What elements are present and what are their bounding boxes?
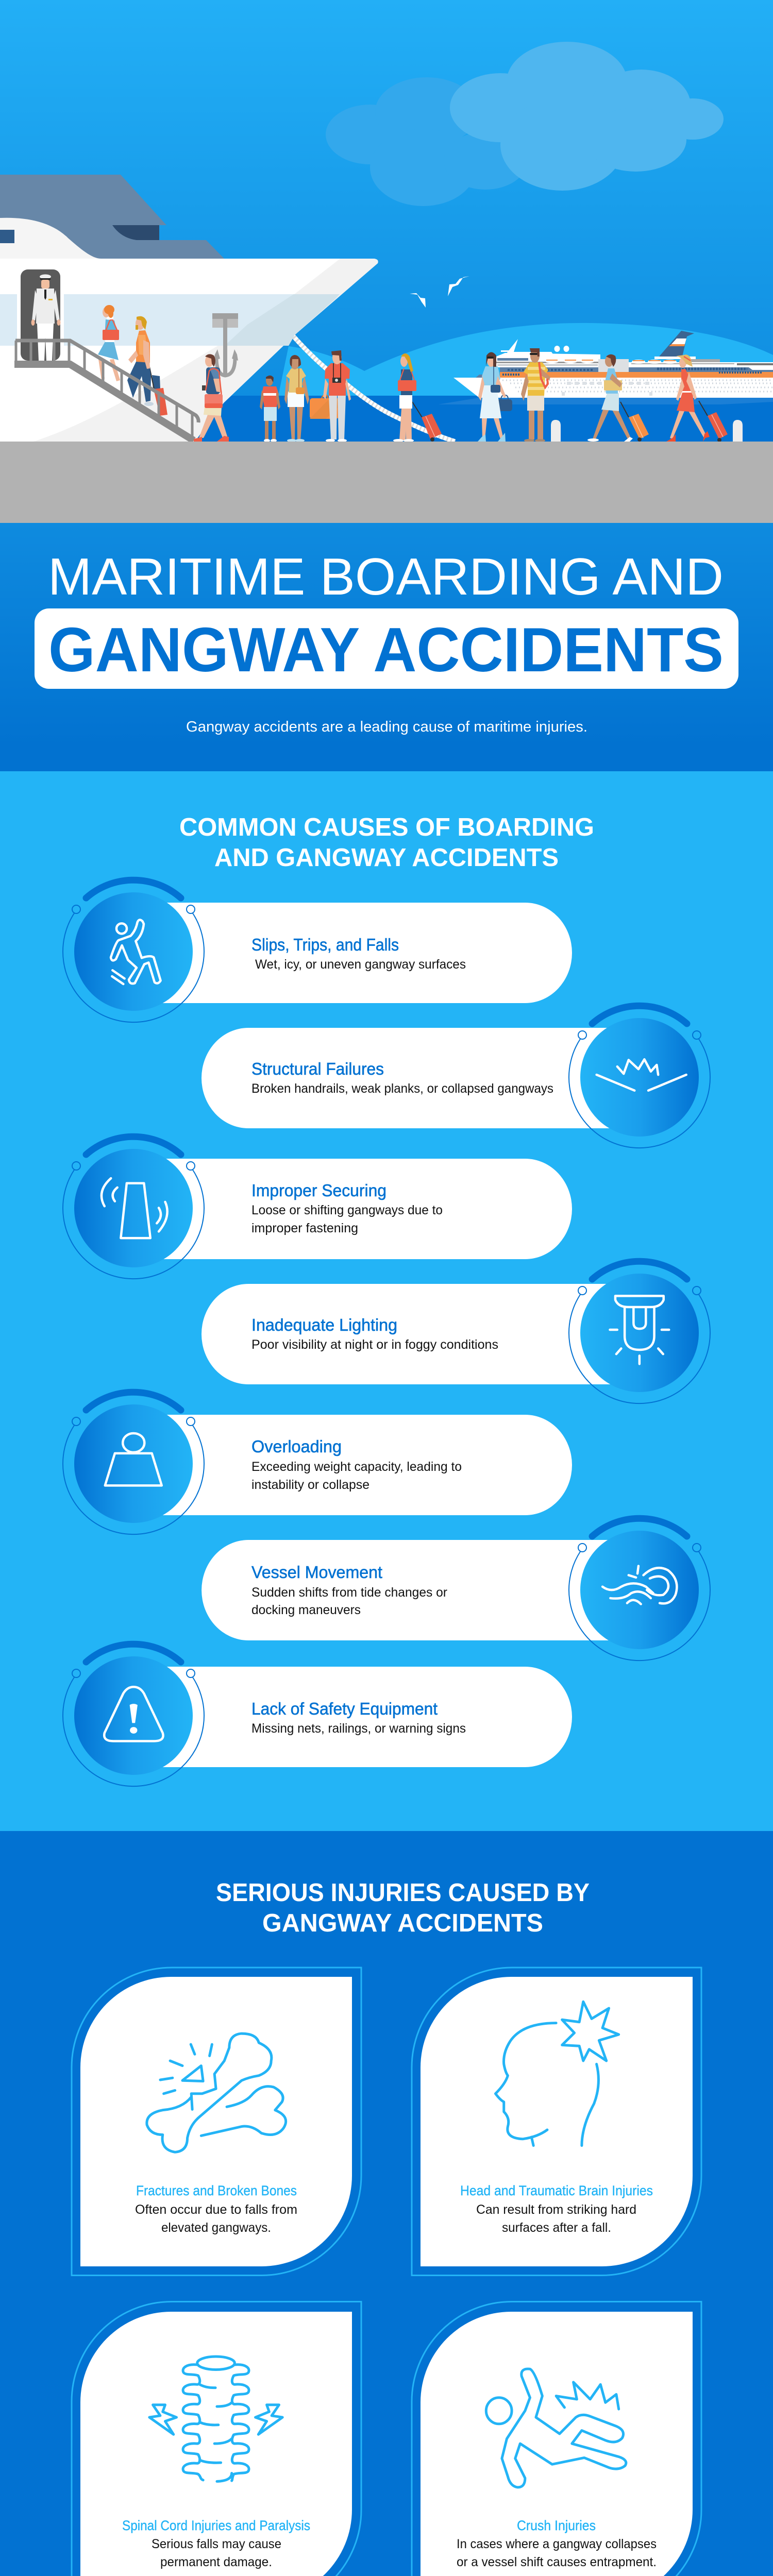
heading: serious injuries: [216, 1879, 590, 1937]
cause: slips, trips and falls: [63, 880, 572, 1022]
heading: serious injuries: SERIOUS INJURIES CAUSED BY: [216, 1879, 590, 1907]
passenger: boy: [260, 376, 280, 442]
icon: tide wave: [602, 1566, 677, 1604]
icon: person slipping: [111, 920, 161, 984]
passenger: woman in red dress with hat: [666, 354, 728, 442]
gangway stairs: [14, 341, 198, 440]
cause: lack of safety equipment: [63, 1644, 572, 1786]
anchor: [212, 313, 238, 376]
description: head injuries: [476, 2202, 636, 2235]
icon: shaking gangway: [102, 1178, 167, 1238]
description: safety equipment: Missing nets, railings, or warning signs: [251, 1721, 466, 1736]
icon: cloud: [326, 42, 724, 206]
text: improper securing: Improper Securing: [251, 1181, 386, 1200]
description: crush: In cases where a gangway collapses: [457, 2537, 657, 2551]
title line 1: MARITIME BOARDING AND: [48, 548, 724, 606]
sea: [0, 396, 773, 442]
heading: common causes: AND GANGWAY ACCIDENTS: [214, 844, 559, 872]
description: fractures: elevated gangways.: [161, 2221, 271, 2235]
cause: overloading: [63, 1392, 572, 1534]
panel: common causes: [0, 771, 773, 1831]
title line 2: GANGWAY ACCIDENTS: [48, 615, 724, 685]
description: spinal: [152, 2537, 281, 2569]
heading: serious injuries: GANGWAY ACCIDENTS: [262, 1909, 543, 1937]
description: lighting: Poor visibility at night or in foggy conditions: [251, 1337, 498, 1352]
pier: [0, 442, 773, 523]
icon: lamp: [610, 1296, 669, 1364]
description: head injuries: surfaces after a fall.: [502, 2221, 611, 2235]
injury: head and brain: [412, 1968, 701, 2275]
door: [21, 269, 60, 361]
description: improper securing: improper fastening: [251, 1221, 358, 1235]
heading: common causes: [179, 814, 594, 872]
description: fractures: Often occur due to falls from: [135, 2202, 297, 2217]
passenger: man with camera: [323, 350, 351, 442]
description: overloading: Exceeding weight capacity, leading to: [251, 1460, 462, 1474]
panel: serious injuries: [0, 1831, 773, 2576]
hills: [278, 323, 773, 396]
description: slips: Wet, icy, or uneven gangway surfaces: [255, 957, 466, 972]
text: crush: Crush Injuries: [517, 2518, 596, 2533]
icon: weight: [105, 1433, 162, 1485]
description: spinal: Serious falls may cause: [152, 2537, 281, 2551]
description: head injuries: Can result from striking hard: [476, 2202, 636, 2217]
far cruise ship: [438, 331, 773, 404]
passenger: man in striped shirt: [521, 348, 550, 442]
icon: spine: [149, 2357, 282, 2481]
icon: seagulls: [410, 276, 469, 308]
cause: vessel movement: [201, 1518, 710, 1660]
icon: collapse burst: [597, 1059, 686, 1091]
description: vessel movement: docking maneuvers: [251, 1603, 361, 1617]
text: slips: Slips, Trips, and Falls: [251, 935, 399, 954]
passenger: woman in pale blue dress: [478, 352, 512, 442]
icon: warning triangle: [104, 1687, 163, 1741]
text: spinal: Spinal Cord Injuries and Paralysis: [122, 2518, 310, 2533]
description: structural: Broken handrails, weak planks, or collapsed gangways: [251, 1081, 553, 1096]
text: overloading: Overloading: [251, 1437, 342, 1456]
ship officer: [31, 274, 61, 361]
icon: crushed figure: [486, 2369, 626, 2487]
bollard: [551, 420, 561, 442]
passenger on stairs: woman with red bag: [98, 305, 120, 381]
hero illustration: [0, 0, 773, 523]
cause: structural failures: [201, 1006, 710, 1148]
panel: title: [0, 523, 773, 771]
orange travel bag: [310, 395, 339, 419]
passenger: blonde woman with suitcase: [393, 353, 442, 442]
text: safety equipment: Lack of Safety Equipment: [251, 1699, 438, 1718]
injury: spinal cord: [72, 2302, 361, 2576]
description: spinal: permanent damage.: [160, 2555, 272, 2569]
description: overloading: [251, 1460, 462, 1492]
icon: broken bone: [147, 2033, 286, 2152]
bollard: [733, 420, 743, 442]
passenger: man with red bag: [194, 354, 229, 442]
mooring rope: [292, 335, 455, 442]
description: crush: or a vessel shift causes entrapment.: [457, 2555, 657, 2569]
injury: fractures: [72, 1968, 361, 2275]
description: vessel movement: [251, 1585, 447, 1617]
icon: head impact: [495, 2002, 619, 2146]
passenger on stairs: man in orange with luggage: [127, 316, 167, 416]
passenger: woman in yellow: [284, 355, 309, 442]
description: fractures: [135, 2202, 297, 2235]
heading: common causes: COMMON CAUSES OF BOARDING: [179, 814, 594, 841]
cause: improper securing: [63, 1137, 572, 1279]
ship hull: [0, 259, 378, 442]
text: structural: Structural Failures: [251, 1059, 384, 1078]
text: lighting: Inadequate Lighting: [251, 1315, 397, 1334]
description: vessel movement: Sudden shifts from tide changes or: [251, 1585, 447, 1600]
cause: inadequate lighting: [201, 1261, 710, 1403]
subtitle: Gangway accidents are a leading cause of maritime injuries.: [186, 719, 587, 735]
description: crush: [457, 2537, 657, 2569]
description: improper securing: [251, 1203, 443, 1235]
text: vessel movement: Vessel Movement: [251, 1563, 382, 1582]
ship superstructure: [0, 175, 224, 259]
description: overloading: instability or collapse: [251, 1478, 369, 1492]
title pill: [35, 608, 738, 689]
text: fractures: Fractures and Broken Bones: [136, 2183, 297, 2198]
passenger: woman with orange suitcase: [587, 354, 649, 442]
description: improper securing: Loose or shifting gangways due to: [251, 1203, 443, 1217]
text: head injuries: Head and Traumatic Brain Injuries: [460, 2183, 653, 2198]
injury: crush: [412, 2302, 701, 2576]
